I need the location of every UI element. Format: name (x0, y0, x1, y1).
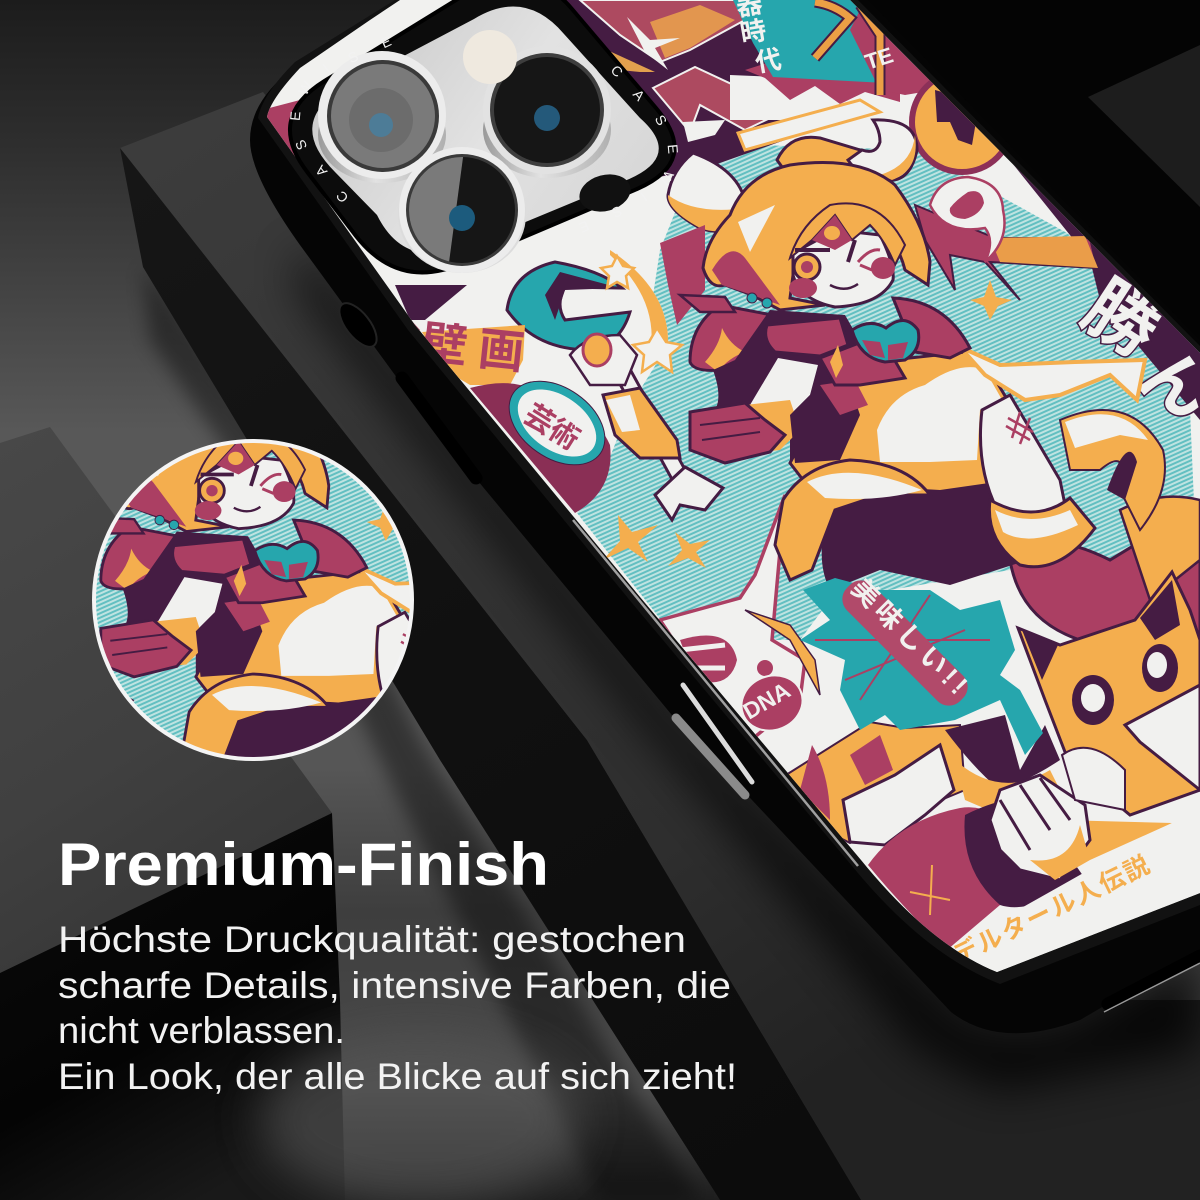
body text: nicht verblassen. (58, 1010, 345, 1051)
ring lettering: I (638, 189, 650, 205)
detail magnifier circle (0, 351, 552, 798)
flash (463, 30, 517, 84)
ring lettering: A (630, 86, 649, 104)
charging port (1104, 956, 1200, 1012)
fist (690, 403, 785, 463)
phone shadow (300, 245, 1200, 1090)
dress shade (820, 380, 868, 415)
ring lettering: E (287, 111, 303, 121)
hand light (606, 395, 640, 432)
back hair (690, 305, 772, 370)
right horn (848, 120, 917, 180)
flames orange (955, 760, 1060, 815)
block: top right (1088, 45, 1200, 207)
button hole (333, 297, 383, 353)
printed artwork (250, 0, 1200, 1010)
body (790, 352, 1040, 520)
heart facet 2 (888, 342, 908, 360)
gold star 2 (668, 532, 710, 568)
bone (623, 373, 687, 490)
fist (990, 775, 1090, 880)
right horn shade (880, 135, 916, 180)
bottom katakana: デルタール人伝説 (948, 850, 1154, 970)
band (915, 205, 1098, 300)
left horn shade (668, 195, 748, 231)
DNA badge (742, 674, 802, 732)
rays (422, 325, 525, 385)
fringe (790, 203, 905, 265)
print base (250, 0, 1200, 1010)
label 壁画: 壁画 (419, 316, 527, 379)
white horn bar (738, 100, 880, 150)
heart gem (852, 320, 919, 362)
cape center (820, 335, 905, 385)
kanji on teal 2: 時 (738, 15, 769, 49)
ring lettering: C (608, 62, 626, 80)
left arm (750, 358, 818, 420)
lens: top right (483, 46, 611, 178)
badge kanji: 芸術 (518, 398, 585, 457)
kanji on teal 3: 代 (753, 44, 784, 78)
character (570, 120, 1165, 590)
case body (250, 0, 1200, 1033)
ring lettering: S (652, 112, 670, 128)
camera module (287, 0, 681, 273)
gold stars (603, 515, 658, 562)
floor glow (260, 1035, 580, 1200)
left sliver (262, 100, 420, 340)
anklet (989, 498, 1095, 567)
earring 1 (747, 293, 757, 303)
zigzag band (730, 75, 790, 120)
ring lettering: I (319, 61, 333, 75)
eye iris (583, 334, 611, 366)
block: lower left surface (0, 427, 332, 973)
lower face panel (786, 722, 965, 845)
back hair flame (705, 328, 745, 372)
mouth (830, 284, 858, 289)
hip (877, 367, 1005, 462)
body text: Höchste Druckqualität: gestochen (58, 919, 686, 960)
phone case (250, 0, 1200, 1033)
badge inner (518, 390, 596, 456)
ring lettering: E (665, 144, 681, 154)
camera bezel (290, 0, 675, 272)
hair highlight (738, 205, 775, 252)
DNA helix (680, 636, 737, 682)
jewel (823, 225, 841, 241)
ring lettering: E (378, 33, 394, 51)
flames (945, 715, 1060, 790)
orange wisp (745, 610, 820, 695)
heading: Premium-Finish (58, 831, 549, 898)
ring lettering: C (333, 188, 351, 206)
dark top right (700, 0, 1200, 520)
ring lettering (287, 33, 681, 236)
right kanji: 勝 (1069, 266, 1173, 373)
spike (660, 495, 805, 745)
earring 2 (762, 298, 772, 308)
teal badge (508, 380, 606, 466)
glass plate (312, 7, 659, 254)
DNA badge: DNA (738, 677, 795, 724)
right leg (980, 395, 1068, 520)
ring lettering: W (295, 78, 316, 98)
helix stripes (680, 645, 725, 668)
burst text: 美味しい!! (846, 573, 973, 700)
right orange limb (1120, 497, 1200, 600)
hair (703, 162, 930, 310)
ring lettering: S (345, 48, 361, 66)
teal block (733, 0, 925, 84)
orange emblem (909, 80, 1004, 175)
magenta lower body (1010, 505, 1200, 660)
face (793, 230, 893, 307)
cape flame (830, 345, 843, 378)
tail highlight (1065, 414, 1148, 448)
forearm (735, 400, 800, 455)
teal block lettering: TE (862, 42, 896, 75)
edge purple (1013, 164, 1200, 420)
heart facet (862, 340, 885, 358)
brows (795, 240, 855, 262)
block: lower left face (0, 813, 345, 1200)
stretched arm (960, 347, 1145, 400)
body text: Ein Look, der alle Blicke auf sich zieht! (58, 1056, 737, 1097)
cheek left (789, 278, 817, 298)
dot (757, 660, 773, 676)
rope (815, 2, 880, 95)
eye (794, 254, 820, 280)
lens: bottom (398, 147, 526, 273)
star 2 (633, 328, 682, 372)
cape left (766, 318, 848, 356)
body text (58, 919, 737, 1097)
side star (970, 280, 1012, 320)
wink (858, 250, 880, 270)
pupil (801, 261, 813, 273)
teal hatched field (577, 145, 1200, 640)
claw shape (507, 262, 630, 350)
left horn (668, 153, 748, 231)
ring lettering: W (656, 168, 677, 188)
print decor left (395, 249, 682, 513)
orb crescent (964, 799, 1086, 907)
fringe shade (812, 215, 852, 250)
hand (603, 388, 680, 458)
hair bun (777, 137, 860, 178)
tail (1060, 410, 1165, 530)
case front bezel (258, 0, 1200, 984)
magnifier background (90, 440, 420, 760)
bone end (655, 467, 723, 520)
star (601, 256, 634, 288)
dress (790, 385, 860, 463)
top lettering (565, 0, 790, 180)
ear (680, 295, 735, 312)
magnified artwork (0, 351, 552, 798)
zigzag magenta (745, 62, 900, 104)
block: central face shadow (143, 267, 700, 1200)
orange triangle (1060, 820, 1172, 860)
thigh (775, 460, 930, 580)
ring lettering: S (609, 203, 625, 221)
eye on bone (570, 335, 637, 385)
ring lettering: A (311, 162, 330, 180)
orb cross (910, 865, 950, 915)
ring lettering: E (576, 218, 592, 236)
tail shadow (1107, 452, 1137, 500)
magnifier ring (94, 441, 412, 759)
silver side button (676, 685, 752, 795)
knuckles (700, 418, 760, 440)
block: central face (120, 148, 861, 1200)
burst (800, 573, 1043, 755)
purple shadow (822, 480, 1028, 590)
volume buttons (402, 378, 476, 478)
edge highlight (573, 520, 858, 866)
speech bubble heart (930, 177, 1005, 262)
thigh light (807, 473, 922, 499)
cape right (893, 298, 970, 358)
magenta planet (470, 383, 611, 513)
dark under cape (713, 310, 885, 470)
lens: top left (318, 51, 446, 183)
microphone hole (575, 169, 635, 217)
top magenta corner (850, 10, 935, 95)
scar (1006, 412, 1033, 444)
body text: scharfe Details, intensive Farben, die (58, 965, 731, 1006)
anklet light (995, 510, 1078, 539)
bottom white band (947, 810, 1200, 1000)
bone inner (623, 373, 687, 490)
magenta orb (868, 807, 1040, 950)
cat (1018, 572, 1200, 815)
left strand (660, 225, 705, 325)
cheek right (871, 257, 895, 279)
hair shadow (712, 251, 780, 305)
ring lettering: S (292, 137, 310, 153)
